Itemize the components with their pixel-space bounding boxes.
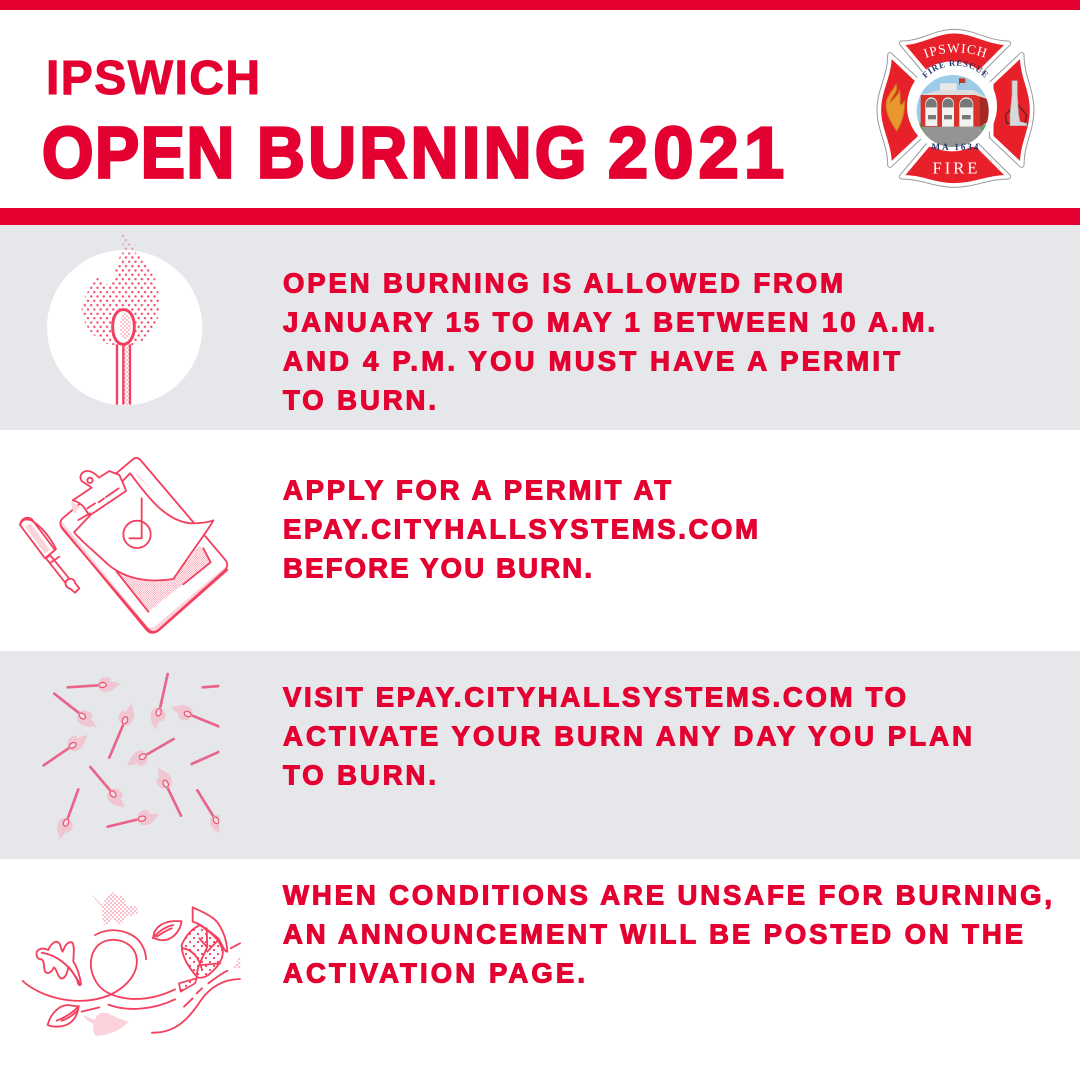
text: apply for a permit: [283, 475, 758, 584]
text: burn season: AND 4 P.M. YOU MUST HAVE A PERMIT: [283, 346, 900, 377]
text: unsafe conditions: AN ANNOUNCEMENT WILL BE POSTED ON THE: [283, 919, 1023, 950]
header divider bar: [0, 208, 1080, 225]
badge lettering: MA 1634: [932, 142, 979, 152]
icon: burning match: [47, 231, 202, 408]
text: activate your burn: [283, 682, 972, 791]
badge lettering: [922, 44, 988, 177]
panel: activate your burn: [0, 651, 1080, 859]
text: activate your burn: TO BURN.: [283, 760, 436, 791]
logo: Ipswich Fire Rescue badge: [876, 28, 1034, 188]
text: apply for a permit: EPAY.CITYHALLSYSTEMS.COM: [283, 514, 758, 545]
nozzle emblem: [1005, 81, 1027, 126]
title: OPEN BURNING 2021: 2021: [608, 114, 784, 194]
badge cross: [879, 32, 1032, 185]
text: burn season: OPEN BURNING IS ALLOWED FROM: [283, 268, 843, 299]
title: OPEN BURNING 2021: [42, 112, 784, 194]
panel: unsafe conditions: [23, 880, 1052, 1036]
text: unsafe conditions: WHEN CONDITIONS ARE UNSAFE FOR BURNING,: [283, 880, 1052, 911]
title: OPEN BURNING 2021: BURNING: [257, 112, 586, 193]
text: unsafe conditions: [283, 880, 1052, 989]
text: activate your burn: ACTIVATE YOUR BURN ANY DAY YOU PLAN: [283, 721, 972, 752]
text: burn season: [283, 268, 935, 416]
icon: leaves in wind: [23, 892, 241, 1036]
icon: scattered matches: [44, 674, 232, 843]
fire station building: [915, 78, 992, 148]
badge lettering: IPSWICH: [923, 44, 988, 58]
flame emblem: [886, 84, 905, 131]
panel: burn season: [0, 225, 1080, 430]
text: unsafe conditions: ACTIVATION PAGE.: [283, 958, 585, 989]
icon: clipboard and pen: [20, 458, 227, 633]
text: burn season: JANUARY 15 TO MAY 1 BETWEEN 10 A.M.: [283, 307, 935, 338]
panel: apply for a permit: [20, 458, 758, 633]
heading: IPSWICH: IPSWICH: [46, 52, 260, 105]
top red bar: [0, 0, 1080, 10]
text: activate your burn: VISIT EPAY.CITYHALLSYSTEMS.COM TO: [283, 682, 906, 713]
badge lettering: FIRE: [932, 158, 977, 177]
text: apply for a permit: BEFORE YOU BURN.: [283, 553, 592, 584]
text: burn season: TO BURN.: [283, 385, 436, 416]
badge center: [907, 61, 997, 151]
text: apply for a permit: APPLY FOR A PERMIT AT: [283, 475, 671, 506]
title: OPEN BURNING 2021: OPEN: [42, 112, 234, 193]
badge lettering: FIRE RESCUE: [922, 60, 988, 78]
